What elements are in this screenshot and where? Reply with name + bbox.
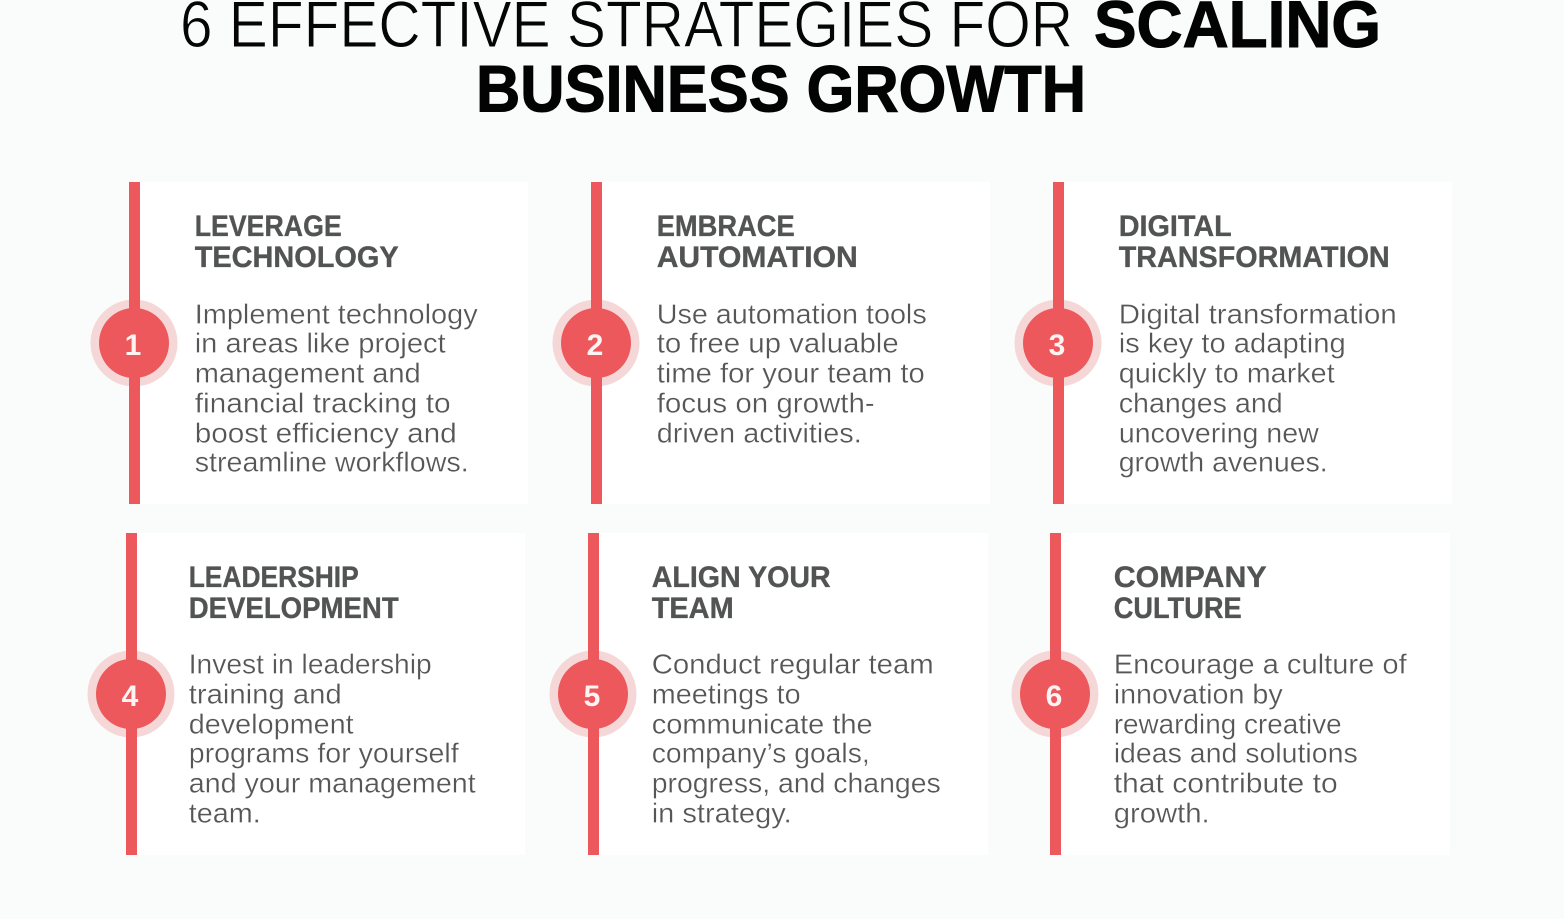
panel: company culture	[1012, 533, 1450, 855]
number badge 4	[88, 650, 174, 738]
body text 4: development	[189, 708, 354, 739]
title	[180, 0, 1381, 126]
heading 3: DIGITAL	[1119, 210, 1232, 243]
body text 3: uncovering new	[1119, 417, 1319, 448]
body text 6	[1114, 648, 1407, 828]
heading 5	[652, 561, 831, 625]
heading 5: TEAM	[652, 592, 734, 625]
body text 2: focus on growth-	[657, 387, 875, 418]
body text 4: programs for yourself	[189, 737, 459, 768]
body text 5: meetings to	[652, 678, 801, 709]
heading 3	[1119, 210, 1390, 274]
panel: align your team	[550, 533, 988, 855]
panel: digital transformation	[1014, 182, 1452, 504]
body text 6: innovation by	[1114, 678, 1283, 709]
number badge 6: 6	[1046, 680, 1062, 713]
panel: embrace automation	[552, 182, 990, 504]
heading 4: DEVELOPMENT	[189, 592, 399, 625]
body text 1	[195, 298, 478, 477]
body text 1: in areas like project	[195, 327, 446, 358]
body text 6: growth.	[1114, 797, 1210, 828]
heading 2: AUTOMATION	[657, 241, 858, 274]
body text 3: quickly to market	[1119, 357, 1335, 388]
number badge 3	[1014, 299, 1102, 387]
heading 6: CULTURE	[1114, 592, 1242, 625]
heading 5: ALIGN YOUR	[652, 561, 831, 594]
body text 3: changes and	[1119, 387, 1283, 418]
body text 3: is key to adapting	[1119, 327, 1346, 358]
heading 3: TRANSFORMATION	[1119, 241, 1390, 274]
body text 2	[657, 298, 927, 448]
body text 5: in strategy.	[652, 797, 792, 828]
body text 3	[1119, 298, 1397, 477]
heading 1: TECHNOLOGY	[195, 241, 399, 274]
body text 5: communicate the	[652, 708, 873, 739]
body text 5: company’s goals,	[652, 737, 870, 768]
number badge 4: 4	[122, 680, 139, 713]
heading 4: LEADERSHIP	[189, 561, 359, 594]
body text 5: progress, and changes	[652, 767, 941, 798]
body text 6: that contribute to	[1114, 767, 1338, 798]
body text 4	[189, 648, 476, 828]
body text 4: and your management	[189, 767, 476, 798]
body text 1: boost efficiency and	[195, 417, 457, 448]
body text 4: Invest in leadership	[189, 648, 432, 679]
heading 4	[189, 561, 399, 625]
heading 6	[1114, 561, 1267, 625]
body text 1: Implement technology	[195, 298, 478, 329]
body text 4: training and	[189, 678, 342, 709]
heading 2	[657, 210, 858, 274]
panel: leverage technology	[90, 182, 528, 504]
body text 6: Encourage a culture of	[1114, 648, 1407, 679]
heading 1: LEVERAGE	[195, 210, 342, 243]
number badge 5: 5	[584, 680, 600, 713]
title: BUSINESS GROWTH	[476, 52, 1086, 126]
number badge 2: 2	[587, 329, 603, 362]
body text 2: to free up valuable	[657, 327, 899, 358]
body text 3: growth avenues.	[1119, 446, 1328, 477]
panel: leadership development	[88, 533, 525, 855]
body text 5	[652, 648, 941, 828]
body text 3: Digital transformation	[1119, 298, 1397, 329]
body text 2: Use automation tools	[657, 298, 927, 329]
heading 2: EMBRACE	[657, 210, 795, 243]
heading 6: COMPANY	[1114, 561, 1267, 594]
number badge 2	[552, 299, 640, 387]
body text 2: driven activities.	[657, 417, 862, 448]
body text 1: management and	[195, 357, 421, 388]
body text 2: time for your team to	[657, 357, 925, 388]
number badge 3: 3	[1049, 329, 1065, 362]
body text 6: ideas and solutions	[1114, 737, 1358, 768]
number badge 1: 1	[125, 329, 141, 362]
number badge 6	[1012, 650, 1098, 738]
body text 1: financial tracking to	[195, 387, 451, 418]
number badge 1	[90, 299, 178, 387]
body text 6: rewarding creative	[1114, 708, 1342, 739]
body text 1: streamline workflows.	[195, 446, 469, 477]
heading 1	[195, 210, 399, 274]
body text 5: Conduct regular team	[652, 648, 934, 679]
number badge 5	[550, 650, 636, 738]
body text 4: team.	[189, 797, 261, 828]
